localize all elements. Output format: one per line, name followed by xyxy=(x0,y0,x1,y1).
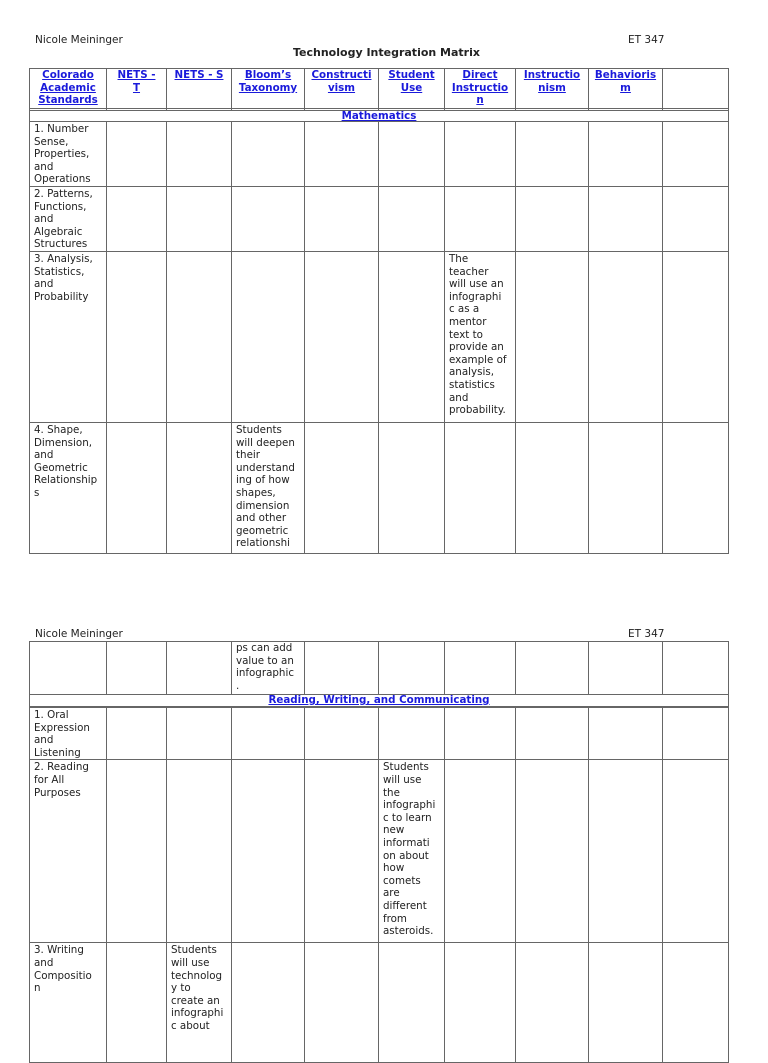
table: page 1 matrix: The xyxy=(449,253,468,265)
table: page 1 matrix: 2. Patterns, xyxy=(34,188,93,200)
table: page 2 matrix: infographi xyxy=(383,799,435,811)
table: page 1 matrix: will use an xyxy=(449,278,504,290)
table: page 1 matrix: and xyxy=(34,449,53,461)
table: page 2 matrix: c about xyxy=(171,1020,210,1032)
table: page 2 matrix: Students xyxy=(171,944,217,956)
table: page 2 matrix: will use xyxy=(171,957,210,969)
table: page 1 matrix: Behavioris xyxy=(595,69,656,81)
table: page 1 matrix: and other xyxy=(236,512,286,524)
table: page 1 matrix: their xyxy=(236,449,260,461)
table: page 1 matrix: ing of how xyxy=(236,474,290,486)
table: page 1 matrix: Operations xyxy=(34,173,91,185)
table: page 1 matrix: vism xyxy=(328,82,355,94)
table: page 1 matrix: Structures xyxy=(34,238,87,250)
table: page 1 matrix: Instructio xyxy=(524,69,580,81)
table: page 1 matrix: Sense, xyxy=(34,136,68,148)
table: page 1 matrix xyxy=(29,68,729,554)
table: page 2 matrix: on about xyxy=(383,850,429,862)
table: page 2 matrix: technolog xyxy=(171,970,222,982)
table: page 1 matrix: Students xyxy=(236,424,282,436)
table: page 1 matrix: and xyxy=(449,392,468,404)
table: page 1 matrix: Direct xyxy=(462,69,498,81)
table: page 1 matrix: Colorado xyxy=(42,69,94,81)
table: page 1 matrix: 1. Number xyxy=(34,123,88,135)
table: page 2 matrix: . xyxy=(236,680,239,692)
table: page 1 matrix: analysis, xyxy=(449,366,494,378)
table: page 1 matrix: and xyxy=(34,213,53,225)
table: page 2 matrix: will use xyxy=(383,774,422,786)
table: page 2 matrix: are xyxy=(383,887,400,899)
table: page 2 matrix: n xyxy=(34,982,41,994)
table: page 2 matrix xyxy=(29,641,729,1063)
table: page 2 matrix: infographic xyxy=(236,667,294,679)
table: page 1 matrix: statistics xyxy=(449,379,495,391)
table: page 2 matrix: y to xyxy=(171,982,191,994)
table: page 1 matrix: Taxonomy xyxy=(239,82,297,94)
table: page 1 matrix: Bloom’s xyxy=(245,69,291,81)
table: page 1 matrix: Algebraic xyxy=(34,226,82,238)
table: page 2 matrix: for All xyxy=(34,774,64,786)
table: page 1 matrix: and xyxy=(34,161,53,173)
table: page 1 matrix: shapes, xyxy=(236,487,276,499)
table: page 1 matrix: Properties, xyxy=(34,148,89,160)
table: page 1 matrix: infographi xyxy=(449,291,501,303)
table: page 2 matrix: new xyxy=(383,824,404,836)
title: Technology Integration Matrix xyxy=(293,46,480,59)
table: page 2 matrix: 3. Writing xyxy=(34,944,84,956)
table: page 2 matrix: how xyxy=(383,862,404,874)
table: page 1 matrix: nism xyxy=(538,82,566,94)
table: page 1 matrix: provide an xyxy=(449,341,504,353)
table: page 2 matrix: Students xyxy=(383,761,429,773)
table: page 2 matrix: different xyxy=(383,900,427,912)
header: author: Nicole Meininger xyxy=(35,34,123,46)
table: page 1 matrix: will deepen xyxy=(236,437,295,449)
table: page 2 matrix: the xyxy=(383,787,400,799)
table: page 2 matrix: Purposes xyxy=(34,787,81,799)
table: page 1 matrix: understand xyxy=(236,462,295,474)
table: page 1 matrix: 3. Analysis, xyxy=(34,253,93,265)
header page 2: author: Nicole Meininger xyxy=(35,628,123,640)
table: page 1 matrix: mentor xyxy=(449,316,486,328)
table: page 1 matrix: Constructi xyxy=(312,69,371,81)
table: page 1 matrix: T xyxy=(133,82,140,94)
table: page 1 matrix: m xyxy=(620,82,631,94)
table: page 2 matrix: and xyxy=(34,957,53,969)
table: page 1 matrix: Probability xyxy=(34,291,88,303)
table: page 1 matrix: Statistics, xyxy=(34,266,84,278)
table: page 1 matrix: and xyxy=(34,278,53,290)
table: page 1 matrix: Functions, xyxy=(34,201,86,213)
table: page 1 matrix: dimension xyxy=(236,500,289,512)
table: page 1 matrix: n xyxy=(476,94,484,106)
table: page 1 matrix: example of xyxy=(449,354,507,366)
table: page 2 matrix: and xyxy=(34,734,53,746)
table: page 1 matrix: s xyxy=(34,487,39,499)
table: page 1 matrix: probability. xyxy=(449,404,506,416)
table: page 2 matrix: Expression xyxy=(34,722,90,734)
table: page 1 matrix: NETS - S xyxy=(175,69,223,81)
table: page 2 matrix: Compositio xyxy=(34,970,92,982)
table: page 2 matrix: 2. Reading xyxy=(34,761,89,773)
table: page 2 matrix: 1. Oral xyxy=(34,709,69,721)
table: page 1 matrix: c as a xyxy=(449,303,479,315)
table: page 2 matrix: value to an xyxy=(236,655,294,667)
table: page 1 matrix: geometric xyxy=(236,525,288,537)
table: page 1 matrix: Use xyxy=(401,82,422,94)
table: page 2 matrix: Listening xyxy=(34,747,81,759)
table: page 1 matrix: Instructio xyxy=(452,82,508,94)
table: page 2 matrix: c to learn xyxy=(383,812,432,824)
table: page 2 matrix: infographi xyxy=(171,1007,223,1019)
table: page 1 matrix: Student xyxy=(388,69,435,81)
header page 2: course: ET 347 xyxy=(628,628,664,640)
table: page 1 matrix: NETS - xyxy=(118,69,155,81)
table: page 1 matrix: Geometric xyxy=(34,462,88,474)
table: page 1 matrix: 4. Shape, xyxy=(34,424,83,436)
table: page 1 matrix: Dimension, xyxy=(34,437,92,449)
table: page 2 matrix: informati xyxy=(383,837,430,849)
table: page 1 matrix: relationshi xyxy=(236,537,290,549)
table: page 2 matrix: ps can add xyxy=(236,642,292,654)
table: page 1 matrix: text to xyxy=(449,329,483,341)
table: page 2 matrix: comets xyxy=(383,875,421,887)
table: page 2 matrix: from xyxy=(383,912,407,924)
table: page 2 matrix: create an xyxy=(171,995,220,1007)
table: page 1 matrix: Relationship xyxy=(34,474,97,486)
table: page 1 matrix: Academic xyxy=(40,82,96,94)
table: page 2 matrix: asteroids. xyxy=(383,925,433,937)
table: page 1 matrix: teacher xyxy=(449,266,488,278)
table: page 1 matrix: Standards xyxy=(38,94,98,106)
header: course: ET 347 xyxy=(628,34,664,46)
